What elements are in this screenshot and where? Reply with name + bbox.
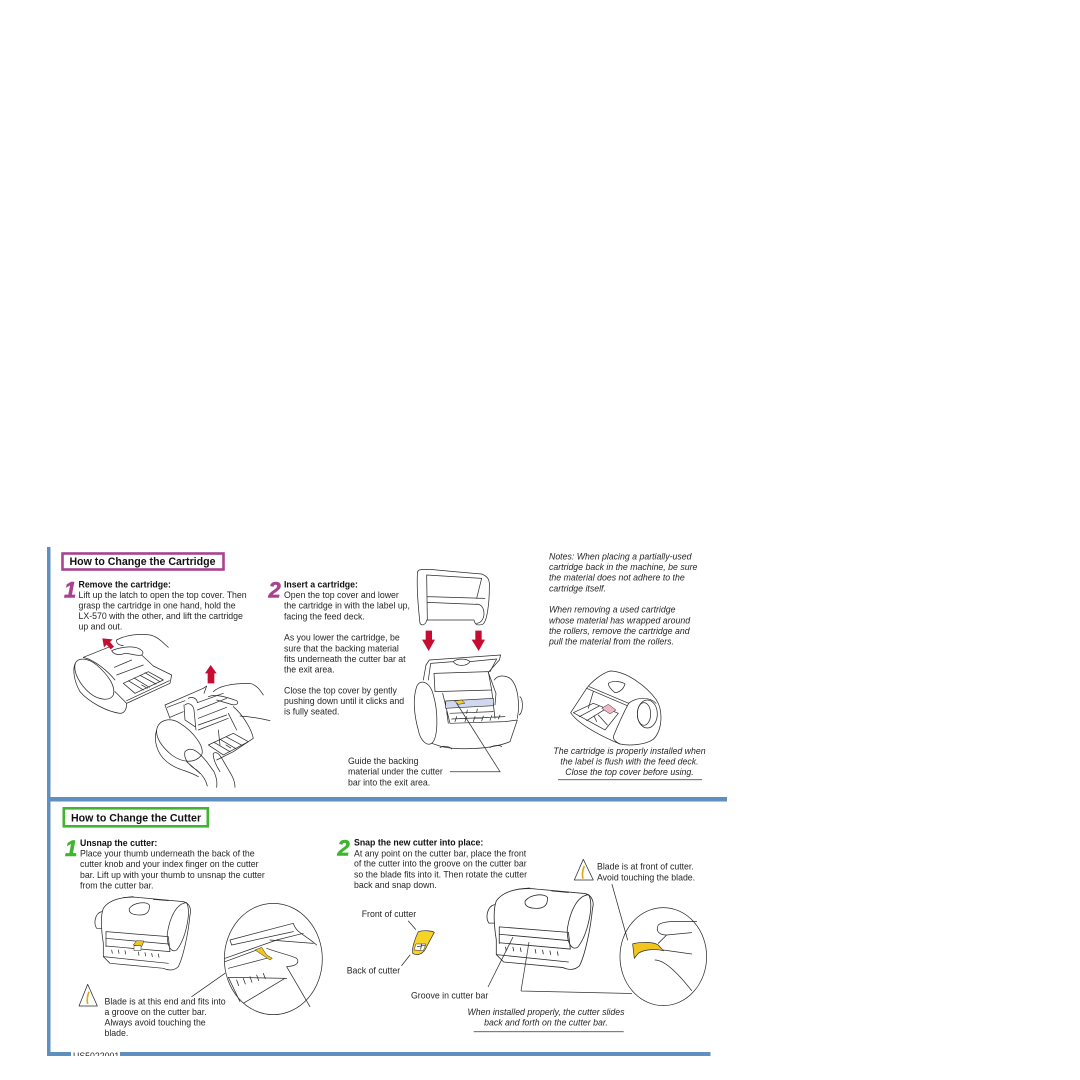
- callout: groove in cutter bar: [411, 937, 632, 1001]
- heading: How to Change the Cartridge: [62, 554, 224, 570]
- illustration: printer with groove in cutter bar: [487, 888, 593, 969]
- step 2 text: insert a cartridge: pushing down until it clicks and: [284, 696, 404, 706]
- step 2 number: cartridge: 2: [268, 578, 282, 602]
- callout: groove in cutter bar: Groove in cutter bar: [411, 991, 488, 1001]
- warning icon: blade: [79, 984, 97, 1006]
- caption: cartridge properly installed: The cartridge is properly installed when: [553, 746, 706, 756]
- step 1 text: unsnap the cutter: cutter knob and your index finger on the cutter: [80, 859, 259, 869]
- illustration: detail circle, cutter held by hand: [612, 884, 707, 1006]
- notes text: cartridge itself.: [549, 583, 606, 593]
- illustration: cutter front and back: Front of cutter: [362, 909, 416, 919]
- step 2 text: insert a cartridge: As you lower the cartridge, be: [284, 633, 400, 643]
- illustration: cutter front and back: [347, 909, 434, 976]
- illustration: cutter front and back: Back of cutter: [347, 966, 400, 976]
- step 2 text: snap the new cutter: so the blade fits into it. Then rotate the cutter: [354, 870, 527, 880]
- step 1 text: remove the cartridge: grasp the cartridge in one hand, hold the: [78, 601, 236, 611]
- notes text: cartridge back in the machine, be sure: [549, 562, 697, 572]
- step 2 text: snap the new cutter: of the cutter into the groove on the cutter bar: [354, 859, 527, 869]
- step 2 text: snap the new cutter: At any point on the cutter bar, place the front: [354, 848, 527, 858]
- printer with closed cover and hand: [74, 634, 172, 713]
- caption: cartridge properly installed: the label is flush with the feed deck.: [560, 757, 699, 767]
- arrow: lift latch: [102, 638, 114, 649]
- step 1 text: unsnap the cutter: Place your thumb underneath the back of the: [80, 849, 255, 859]
- callout: guide the backing material: bar into the exit area.: [348, 777, 430, 787]
- warning text: blade at front: [597, 862, 695, 883]
- notes text: When removing a used cartridge: [549, 605, 676, 615]
- callout: guide the backing material: material under the cutter: [348, 767, 443, 777]
- arrow: down right: [472, 631, 485, 651]
- notes text: pull the material from the rollers.: [548, 637, 674, 647]
- step 2 text: insert a cartridge: fits underneath the cutter bar at: [284, 654, 406, 664]
- step 1 number: cutter: 1: [65, 836, 77, 861]
- caption: cutter installed properly: When installed properly, the cutter slides: [468, 1007, 625, 1017]
- illustration: closed printer with label flush on feed deck: [571, 671, 661, 745]
- warning text: blade at this end: blade.: [104, 1028, 128, 1038]
- caption: cutter installed properly: [468, 1007, 625, 1032]
- step 2 text: insert a cartridge: Open the top cover and lower: [284, 590, 399, 600]
- warning icon: blade at front: [574, 859, 593, 880]
- open printer: [414, 655, 522, 749]
- callout: guide the backing material: [348, 703, 500, 787]
- cartridge: [417, 569, 489, 625]
- step 2 text: insert a cartridge: the exit area.: [284, 664, 335, 674]
- heading: How to Change the Cutter: How to Change the Cutter: [71, 812, 201, 824]
- printer with open cover and two hands: [155, 683, 270, 787]
- illustration: lifting cartridge out of the printer: [74, 634, 270, 787]
- step 1 text: unsnap the cutter: from the cutter bar.: [80, 880, 153, 890]
- illustration: inserting cartridge into open printer: [414, 569, 522, 749]
- warning text: blade at this end: Blade is at this end and fits into: [104, 997, 226, 1007]
- notes text: the material does not adhere to the: [549, 573, 685, 583]
- caption: cutter installed properly: back and forth on the cutter bar.: [484, 1018, 608, 1028]
- caption: cartridge properly installed: [553, 746, 706, 780]
- step 2 text: insert a cartridge: facing the feed deck.: [284, 611, 365, 621]
- step 2 text: insert a cartridge: the cartridge in with the label up,: [284, 601, 410, 611]
- callout: guide the backing material: Guide the backing: [348, 756, 419, 766]
- warning text: blade at this end: a groove on the cutter bar.: [104, 1007, 207, 1017]
- caption: cartridge properly installed: Close the top cover before using.: [565, 767, 694, 777]
- notes text: the rollers, remove the cartridge and: [549, 626, 691, 636]
- step 2 text: insert a cartridge: is fully seated.: [284, 707, 339, 717]
- step 1 text: remove the cartridge: LX-570 with the other, and lift the cartridge: [78, 611, 243, 621]
- notes text: Notes: When placing a partially-used: [549, 552, 693, 562]
- step 1 text: remove the cartridge: up and out.: [78, 621, 122, 631]
- step 2 text: insert a cartridge: Insert a cartridge:: [284, 579, 358, 589]
- heading: How to Change the Cartridge: How to Change the Cartridge: [70, 556, 216, 568]
- illustration: detail circle, thumb unsnapping cutter: [192, 903, 322, 1015]
- notes text: whose material has wrapped around: [549, 615, 691, 625]
- heading: How to Change the Cutter: [64, 808, 208, 826]
- step 1 text: remove the cartridge: Lift up the latch to open the top cover. Then: [78, 590, 247, 600]
- step 1 text: unsnap the cutter: bar. Lift up with your thumb to unsnap the cutter: [80, 870, 265, 880]
- step 1 text: unsnap the cutter: Unsnap the cutter:: [80, 838, 157, 848]
- step 2 text: snap the new cutter: Snap the new cutter into place:: [354, 838, 483, 848]
- arrow: down left: [422, 631, 435, 651]
- document code: US5022001: [73, 1051, 119, 1061]
- step 1 number: cartridge: 1: [64, 578, 76, 602]
- warning text: blade at front: Blade is at front of cutter.: [597, 862, 694, 872]
- page frame: blue rules: [47, 547, 727, 1056]
- warning text: blade at this end: Always avoid touching the: [104, 1018, 206, 1028]
- step 2 text: insert a cartridge: Close the top cover by gently: [284, 686, 397, 696]
- step 2 text: insert a cartridge: sure that the backing material: [284, 643, 399, 653]
- arrow: lift cartridge up: [205, 665, 217, 683]
- step 1 text: remove the cartridge: Remove the cartridge:: [78, 579, 171, 589]
- step 2 number: cutter: 2: [336, 836, 350, 860]
- step 2 text: snap the new cutter: back and snap down.: [354, 880, 437, 890]
- warning text: blade at front: Avoid touching the blade.: [597, 873, 695, 883]
- illustration: printer with cutter on the bar: [95, 897, 191, 970]
